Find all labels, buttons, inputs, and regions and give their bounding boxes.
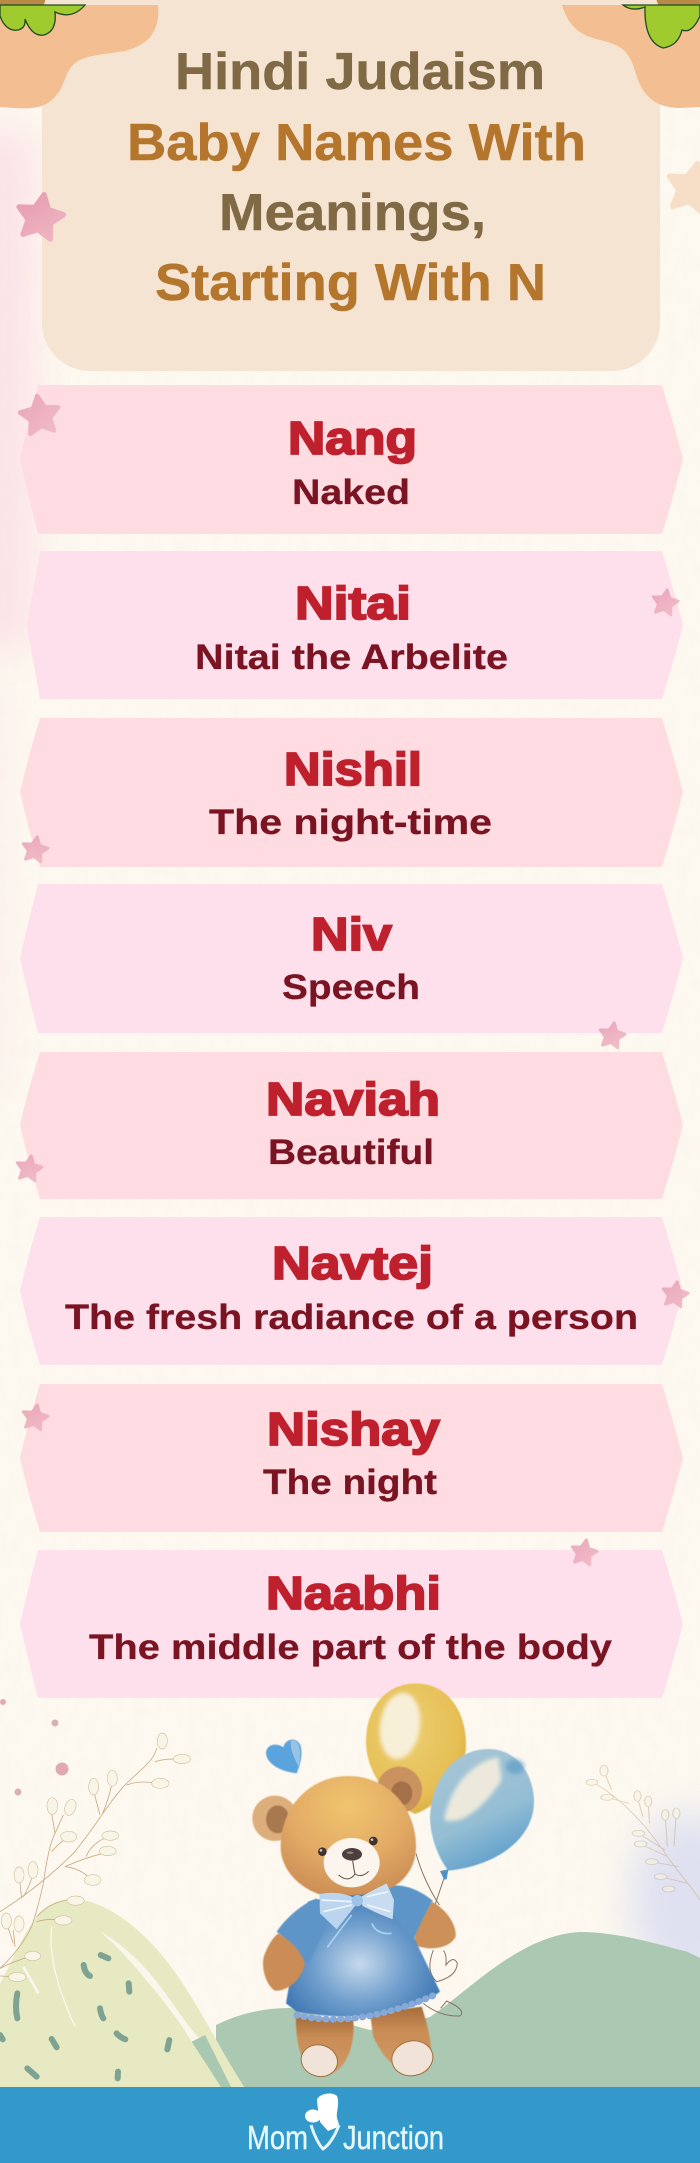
star [18, 393, 61, 435]
meaning: The middle part of the body [89, 1628, 613, 1667]
band shape [20, 385, 683, 534]
name: Niv [311, 908, 392, 960]
band shape [20, 1217, 683, 1365]
star [598, 1021, 627, 1049]
bear: bow [319, 1883, 394, 1947]
meaning: The night-time [209, 803, 492, 842]
band shape [20, 718, 683, 867]
bear: foot pads [298, 2037, 436, 2081]
top strip [0, 0, 700, 5]
title line 3: Meanings, [219, 184, 486, 242]
panel: Nishay [20, 1384, 683, 1532]
name: Naviah [266, 1073, 440, 1125]
decorative stars [15, 393, 690, 1566]
panel: Naviah [20, 1052, 683, 1199]
hill: pale green with dashes [0, 1899, 245, 2088]
illustration: teddy bear with balloons [252, 1683, 534, 2081]
name: Naabhi [266, 1567, 441, 1619]
star [21, 1403, 50, 1431]
meaning: Nitai the Arbelite [195, 638, 508, 677]
bear: face [318, 1837, 380, 1887]
star [21, 835, 50, 863]
panel: Nang [20, 385, 683, 534]
icon: blue heart [266, 1740, 301, 1773]
star [651, 588, 680, 616]
corner blob: right [562, 5, 700, 108]
panel: title background [42, 0, 660, 371]
logo: Junction: Junction [343, 2119, 444, 2156]
logo: baby head [305, 2110, 321, 2122]
meaning: The fresh radiance of a person [65, 1298, 638, 1337]
star: beige right [664, 159, 700, 215]
leaves: right [623, 5, 700, 48]
panel: Nishil [20, 718, 683, 867]
leaves: left [0, 5, 85, 35]
logo [247, 2093, 444, 2156]
title heading [127, 43, 586, 312]
name: Nang [288, 412, 417, 464]
logo: Mom: Mom [247, 2119, 308, 2156]
bear: ears [252, 1767, 422, 1841]
band shape [20, 884, 683, 1033]
pink dots [0, 1699, 68, 1796]
band shape [20, 1550, 683, 1698]
meaning: Beautiful [268, 1133, 434, 1172]
name: Nishil [284, 743, 422, 795]
star [15, 1154, 44, 1182]
name: Navtej [272, 1237, 433, 1289]
panel: Naabhi [20, 1550, 683, 1698]
meaning: The night [263, 1463, 437, 1502]
branch: right [586, 1765, 700, 1900]
bear: right arm [414, 1902, 456, 1948]
balloon: yellow [366, 1683, 466, 1814]
branch: left [0, 1733, 191, 1982]
title line 4: Starting With N [155, 254, 546, 312]
bear: head [281, 1776, 416, 1897]
star [570, 1538, 599, 1566]
name: Nitai [295, 577, 411, 629]
star [661, 1280, 690, 1308]
meaning: Speech [282, 968, 420, 1007]
band shape [20, 1052, 683, 1199]
logo: mother silhouette [317, 2093, 339, 2131]
name: Nishay [267, 1403, 440, 1455]
title panel [0, 0, 700, 371]
band shape [20, 1384, 683, 1532]
panel: Niv [20, 884, 683, 1033]
bear: dress [277, 1885, 440, 2019]
panel: Navtej [20, 1217, 683, 1365]
band shape [27, 551, 683, 699]
bear: left arm [263, 1933, 305, 1991]
logo: heart V [311, 2125, 339, 2149]
title line 2: Baby Names With [127, 114, 586, 172]
footer bar [0, 2087, 700, 2163]
title line 1: Hindi Judaism [175, 43, 545, 101]
bear: legs [296, 2007, 431, 2077]
panel: Nitai [27, 551, 683, 699]
meaning: Naked [292, 473, 410, 512]
balloon strings [416, 1853, 462, 2016]
hill: sage green [216, 1932, 700, 2088]
corner blob: left [0, 5, 158, 108]
balloon: blue [430, 1749, 534, 1879]
star: title left [14, 191, 66, 241]
